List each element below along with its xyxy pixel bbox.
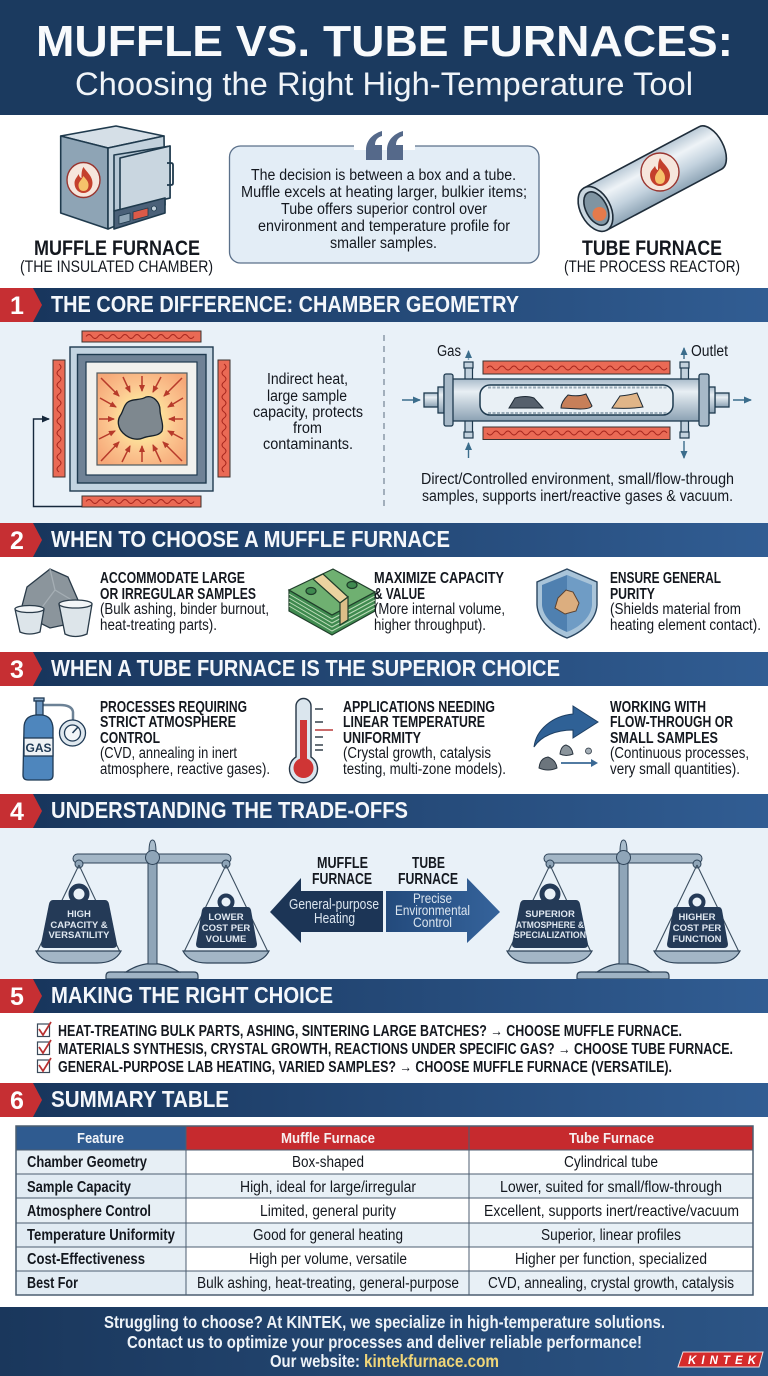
text: tube summary: Direct/Controlled environment, small/flow-through <box>421 471 734 488</box>
icon: curved flow arrow <box>534 706 598 770</box>
text: muffle summary: large sample <box>267 388 347 405</box>
text: purity: (Shields material from <box>610 601 741 618</box>
diagram: tube chamber <box>402 343 751 458</box>
arrow: tube furnace <box>386 855 500 943</box>
weight: higher cost: FUNCTION <box>672 934 722 945</box>
connector arrow <box>34 419 82 506</box>
row: best for: Best For <box>27 1275 78 1292</box>
text: purity: ENSURE GENERAL <box>610 570 721 587</box>
section heading 1: THE CORE DIFFERENCE: CHAMBER GEOMETRY <box>51 291 519 317</box>
text: capacity and value: & VALUE <box>374 586 425 603</box>
arrow: muffle furnace: Heating <box>314 911 355 927</box>
row: temperature uniformity: Superior, linear profiles <box>541 1227 681 1244</box>
flow arrows <box>402 348 751 458</box>
section heading 6: SUMMARY TABLE <box>51 1086 229 1112</box>
text: atmosphere control: CONTROL <box>100 730 160 747</box>
logo: KINTEK <box>678 1352 763 1367</box>
section heading 1 <box>0 288 768 322</box>
arrow: tube furnace: TUBE <box>412 855 445 872</box>
row: best for: CVD, annealing, crystal growth, catalysis <box>488 1275 734 1292</box>
label: gas: Gas <box>437 343 461 360</box>
icon: rock and crucibles <box>15 569 92 636</box>
weight: lower cost <box>196 896 257 948</box>
text: muffle summary: Indirect heat, <box>267 371 348 388</box>
label: muffle furnace: (THE INSULATED CHAMBER) <box>20 258 213 276</box>
text: capacity and value: MAXIMIZE CAPACITY <box>374 570 505 587</box>
table header <box>16 1126 753 1150</box>
weight: high capacity: HIGH <box>67 909 91 920</box>
ports <box>464 362 689 438</box>
arrow: tube furnace: FURNACE <box>398 871 458 888</box>
text: temperature uniformity: LINEAR TEMPERATURE <box>343 714 485 731</box>
footer: kintekfurnace.com <box>364 1351 499 1371</box>
weight: lower cost: LOWER <box>208 912 244 923</box>
footer: Contact us to optimize your processes and deliver reliable performance! <box>127 1332 642 1352</box>
section heading 1: 1 <box>10 292 24 320</box>
row: best for: Bulk ashing, heat-treating, general-purpose <box>197 1275 459 1292</box>
row: cost-effectiveness: High per volume, versatile <box>249 1251 407 1268</box>
scale: muffle trade-offs <box>36 840 269 979</box>
text: temperature uniformity: APPLICATIONS NEEDING <box>343 699 495 716</box>
footer: Our website: <box>270 1351 360 1371</box>
sample rock <box>118 397 163 439</box>
text: purity <box>610 570 761 634</box>
text: capacity and value: (More internal volume, <box>374 601 505 618</box>
icon: muffle furnace <box>61 126 173 229</box>
heating elements <box>53 331 230 507</box>
section heading 5 <box>0 979 768 1013</box>
heating elements <box>483 361 670 440</box>
weight: lower cost: COST PER <box>202 923 250 934</box>
icon: flame badge <box>67 162 100 198</box>
row: chamber geometry: Chamber Geometry <box>27 1154 147 1171</box>
text: large samples <box>100 570 269 634</box>
row: temperature uniformity: Temperature Uniformity <box>27 1227 175 1244</box>
callout: The decision is between a box and a tube. <box>251 167 516 184</box>
text: muffle summary: contaminants. <box>263 436 353 453</box>
text: large samples: OR IRREGULAR SAMPLES <box>100 586 256 603</box>
section heading 4 <box>0 794 768 828</box>
section heading 2: 2 <box>10 527 24 555</box>
callout: smaller samples. <box>330 235 437 252</box>
icon: shield <box>537 569 597 638</box>
text: atmosphere control <box>100 699 270 778</box>
text: atmosphere control: PROCESSES REQUIRING <box>100 699 247 716</box>
weight: superior atmosphere <box>512 886 588 948</box>
panel: trade-offs <box>0 828 768 979</box>
table header: Tube Furnace <box>569 1130 654 1147</box>
text: large samples: heat-treating parts). <box>100 617 217 634</box>
weight: superior atmosphere: SUPERIOR <box>525 909 575 920</box>
label: tube furnace <box>564 237 740 276</box>
row: atmosphere control <box>27 1203 739 1220</box>
text: flow-through: FLOW-THROUGH OR <box>610 714 733 731</box>
text: capacity and value <box>374 570 505 634</box>
arrow: tube furnace: Control <box>413 914 452 930</box>
icon: gas cylinder <box>23 698 86 780</box>
section heading 6 <box>0 1083 768 1117</box>
text: atmosphere control: (CVD, annealing in inert <box>100 745 238 762</box>
logo: KINTEK: KINTEK <box>688 1355 757 1367</box>
section heading 3 <box>0 652 768 686</box>
text: tube summary: samples, supports inert/reactive gases & vacuum. <box>422 488 733 505</box>
arrow: muffle furnace: MUFFLE <box>317 855 368 872</box>
section heading 3: 3 <box>10 656 24 684</box>
row: cost-effectiveness: Cost-Effectiveness <box>27 1251 145 1268</box>
section heading 3: WHEN A TUBE FURNACE IS THE SUPERIOR CHOICE <box>51 655 560 681</box>
text: temperature uniformity <box>343 699 506 778</box>
subtitle: Choosing the Right High-Temperature Tool <box>75 66 693 102</box>
text: temperature uniformity: testing, multi-zone models). <box>343 761 506 778</box>
scale: tube trade-offs <box>507 840 740 979</box>
text: large samples: ACCOMMODATE LARGE <box>100 570 245 587</box>
table header: Feature <box>77 1130 124 1147</box>
footer <box>0 1307 768 1376</box>
row: atmosphere control: Atmosphere Control <box>27 1203 151 1220</box>
text: flow-through <box>610 699 749 778</box>
label: muffle furnace <box>20 237 213 276</box>
row: sample capacity: Sample Capacity <box>27 1179 131 1196</box>
icon: thermometer <box>290 699 333 783</box>
section heading 4: UNDERSTANDING THE TRADE-OFFS <box>51 797 408 823</box>
weight: higher cost: COST PER <box>673 923 721 934</box>
weight: lower cost: VOLUME <box>206 934 246 945</box>
arrow: muffle furnace: General-purpose <box>289 897 379 913</box>
title: MUFFLE VS. TUBE FURNACES: <box>36 17 733 66</box>
weight: superior atmosphere: SPECIALIZATION <box>514 930 586 941</box>
text: atmosphere control: STRICT ATMOSPHERE <box>100 714 236 731</box>
diagram: muffle chamber <box>34 331 230 507</box>
section heading 5: 5 <box>10 983 24 1011</box>
tube body <box>424 374 729 426</box>
label: outlet: Outlet <box>691 343 729 360</box>
weight: high capacity: CAPACITY & <box>50 920 108 931</box>
section heading 2: WHEN TO CHOOSE A MUFFLE FURNACE <box>51 526 450 552</box>
section heading 5: MAKING THE RIGHT CHOICE <box>51 982 333 1008</box>
row: temperature uniformity <box>27 1227 681 1244</box>
weight: superior atmosphere: ATMOSPHERE & <box>516 920 584 931</box>
weight: high capacity: VERSATILITY <box>48 930 110 941</box>
row: best for <box>27 1275 734 1292</box>
icon: cash stack <box>289 569 375 635</box>
text: muffle summary: capacity, protects <box>253 404 363 421</box>
icon: tube furnace <box>571 121 733 237</box>
footer: Struggling to choose? At KINTEK, we specialize in high-temperature solutions. <box>104 1312 665 1332</box>
header banner <box>0 0 768 115</box>
arrow: muffle furnace <box>270 855 383 943</box>
panel: chamber geometry <box>0 322 768 523</box>
text: flow-through: SMALL SAMPLES <box>610 730 718 747</box>
arrow: tube furnace: Environmental <box>395 902 470 918</box>
row: cost-effectiveness: Higher per function, specialized <box>515 1251 707 1268</box>
text: large samples: (Bulk ashing, binder burnout, <box>100 601 269 618</box>
checklist <box>38 1022 733 1076</box>
row: temperature uniformity: Good for general heating <box>253 1227 403 1244</box>
icon: gas cylinder: GAS <box>25 741 52 755</box>
text: muffle summary: from <box>293 420 322 437</box>
text: flow-through: WORKING WITH <box>610 699 706 716</box>
row: chamber geometry: Box-shaped <box>292 1154 364 1171</box>
section heading 4: 4 <box>10 798 24 826</box>
row: sample capacity: High, ideal for large/irregular <box>240 1179 416 1196</box>
weight: high capacity <box>41 886 117 948</box>
table header: Muffle Furnace <box>281 1130 375 1147</box>
text: muffle summary <box>253 371 363 453</box>
section heading 6: 6 <box>10 1087 24 1115</box>
callout: Muffle excels at heating larger, bulkier items; <box>241 184 527 201</box>
row: sample capacity <box>27 1179 722 1196</box>
text: flow-through: (Continuous processes, <box>610 745 749 762</box>
callout <box>230 131 539 263</box>
text: tube summary <box>421 471 734 505</box>
row: chamber geometry: Cylindrical tube <box>564 1154 658 1171</box>
label: muffle furnace: MUFFLE FURNACE <box>34 237 200 260</box>
arrow: muffle furnace: FURNACE <box>312 871 372 888</box>
section heading 2 <box>0 523 768 557</box>
text: temperature uniformity: UNIFORMITY <box>343 730 422 747</box>
row: atmosphere control: Limited, general purity <box>260 1203 396 1220</box>
samples <box>509 393 643 409</box>
text: flow-through: very small quantities). <box>610 761 740 778</box>
icon: quote mark <box>366 131 403 160</box>
callout: environment and temperature profile for <box>258 218 510 235</box>
label: tube furnace: TUBE FURNACE <box>582 237 722 260</box>
row: cost-effectiveness <box>27 1251 707 1268</box>
callout: Tube offers superior control over <box>281 201 487 218</box>
arrow: tube furnace: Precise <box>413 890 452 906</box>
text: capacity and value: higher throughput). <box>374 617 486 634</box>
text: atmosphere control: atmosphere, reactive gases). <box>100 761 270 778</box>
summary table <box>16 1126 753 1295</box>
weight: higher cost: HIGHER <box>679 912 716 923</box>
text: temperature uniformity: (Crystal growth, catalysis <box>343 745 491 762</box>
row: sample capacity: Lower, suited for small/flow-through <box>500 1179 722 1196</box>
row: atmosphere control: Excellent, supports inert/reactive/vacuum <box>484 1203 739 1220</box>
icon: flame badge <box>641 153 679 191</box>
weight: higher cost <box>667 896 728 948</box>
text: purity: PURITY <box>610 586 656 603</box>
heat arrows <box>99 376 183 462</box>
row: chamber geometry <box>27 1154 658 1171</box>
